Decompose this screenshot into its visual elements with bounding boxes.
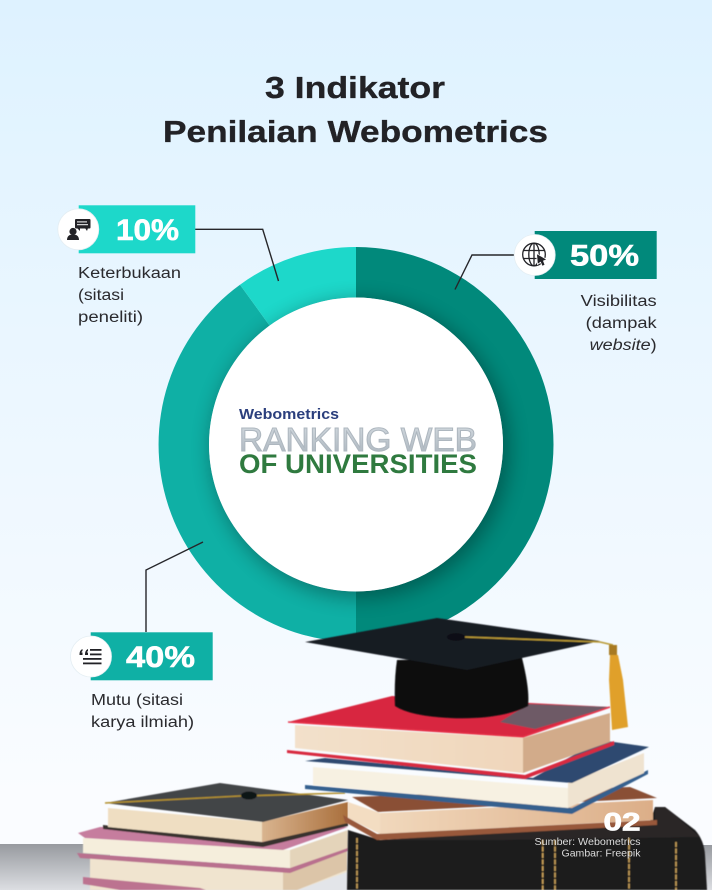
source credits: [534, 836, 641, 860]
label: visibilitas: [581, 293, 657, 354]
label: mutu: Mutu (sitasi: [91, 692, 183, 709]
illustration: left book stack: [77, 783, 348, 890]
callout: keterbukaan 10%: 10%: [116, 214, 179, 247]
label: mutu: karya ilmiah): [91, 714, 194, 731]
tassel: [609, 645, 617, 655]
icon: person with speech bubble: [67, 219, 90, 240]
callout: mutu 40%: [70, 632, 213, 731]
label: keterbukaan: (sitasi: [78, 287, 124, 304]
label: visibilitas: (dampak: [586, 315, 657, 332]
label: mutu: [91, 692, 194, 731]
illustration: central book stack: [287, 696, 707, 890]
illustration: graduation cap: [305, 618, 628, 730]
icon: quotation and text lines: [80, 649, 102, 664]
source credits: Sumber: Webometrics: [534, 836, 640, 848]
logo: Webometrics ranking web of universities: Webometrics: [239, 407, 339, 423]
label: visibilitas: Visibilitas: [581, 293, 657, 310]
lower book: [83, 850, 347, 890]
connector: keterbukaan: [195, 229, 278, 281]
connector: mutu: [146, 542, 203, 632]
cap body: [395, 658, 528, 718]
label: visibilitas: website ): [590, 337, 657, 354]
callout: visibilitas 50%: 50%: [570, 240, 639, 273]
slice: visibilitas 50%: [356, 247, 554, 642]
title: [163, 70, 548, 149]
title: Penilaian Webometrics: [163, 114, 548, 149]
title: 3 Indikator: [265, 70, 445, 105]
slice: keterbukaan 10%: [240, 247, 356, 326]
cord and button: [447, 633, 465, 641]
label: keterbukaan: [78, 265, 181, 326]
pink book: [77, 827, 348, 873]
label: keterbukaan: Keterbukaan: [78, 265, 181, 282]
icon: globe with cursor: [523, 243, 547, 266]
logo: Webometrics ranking web of universities: RANKING WEB: [239, 421, 477, 458]
donut chart: [159, 247, 554, 642]
table surface: [0, 844, 712, 890]
black-cover book with cord: [103, 783, 348, 847]
slice: mutu 40%: [159, 285, 356, 642]
connector: visibilitas: [455, 255, 514, 290]
red book: [287, 696, 614, 779]
source credits: Gambar: Freepik: [562, 848, 641, 860]
brown book: [343, 787, 657, 840]
label: keterbukaan: peneliti): [78, 309, 143, 326]
callout: keterbukaan 10%: [58, 205, 195, 326]
center circle: [209, 298, 503, 592]
logo: Webometrics ranking web of universities: OF UNIVERSITIES: [239, 449, 477, 479]
callout: visibilitas 50%: [514, 231, 657, 354]
page number: 02: [604, 809, 640, 837]
logo: Webometrics ranking web of universities: [239, 407, 477, 479]
cap board: [305, 618, 600, 670]
blue book: [305, 740, 649, 814]
black thick book: [347, 807, 707, 890]
callout: mutu 40%: 40%: [126, 641, 195, 674]
